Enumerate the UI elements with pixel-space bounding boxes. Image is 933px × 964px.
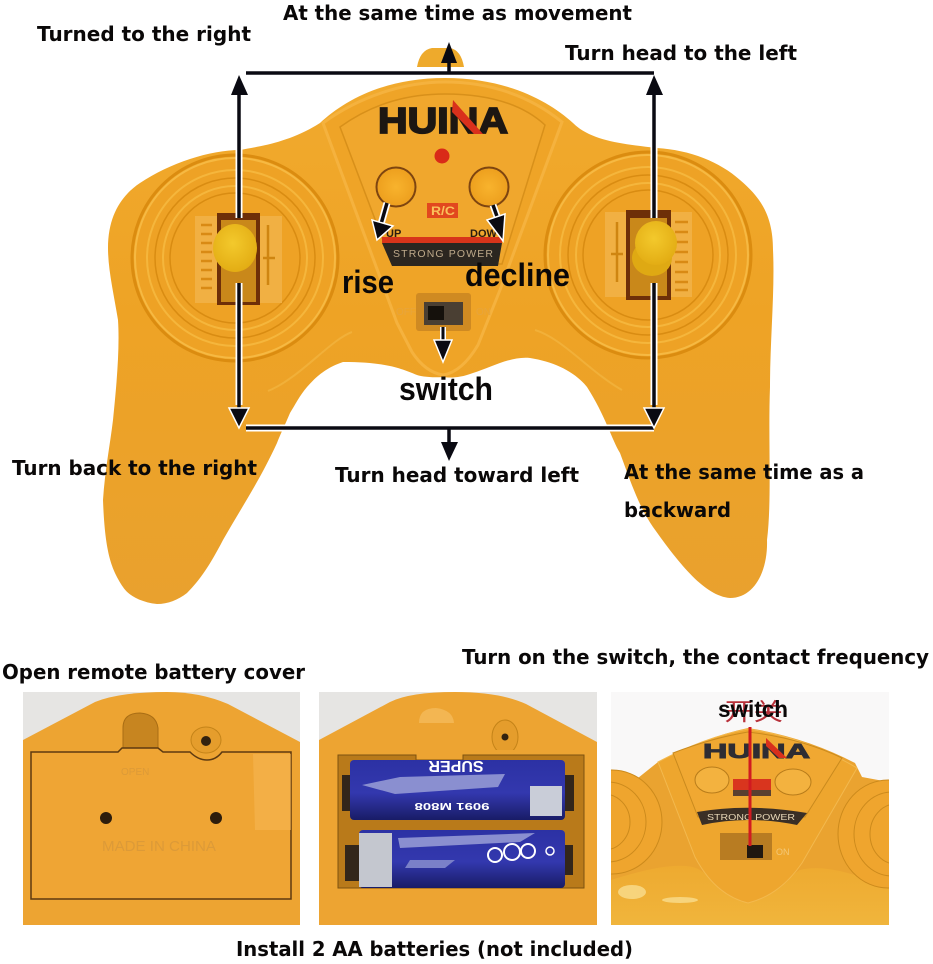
label: turn back to the right: Turn back to the right xyxy=(12,456,257,480)
left joystick slot xyxy=(195,213,282,305)
arrowheads xyxy=(229,42,664,461)
right dial xyxy=(838,780,889,888)
power switch: ON xyxy=(476,307,491,318)
pointer line xyxy=(748,727,752,846)
down button xyxy=(470,168,508,206)
faceplate outer with lower wedge xyxy=(323,82,562,375)
latch xyxy=(419,708,454,723)
label: at the same time as a backward xyxy=(624,460,864,522)
springs xyxy=(342,775,574,881)
label: turn head to the left: Turn head to the left xyxy=(565,41,797,65)
left joystick knob xyxy=(213,224,257,272)
label: turned to the right: Turned to the right xyxy=(37,22,251,46)
switch label: switch xyxy=(718,696,788,722)
label: rise: rise xyxy=(342,264,394,300)
highlights xyxy=(618,885,698,903)
frequency badge xyxy=(733,779,771,796)
top antenna nub xyxy=(417,48,464,67)
switch slot xyxy=(720,833,790,860)
right joystick dial xyxy=(545,152,751,358)
screw post xyxy=(191,727,221,753)
top battery: 9091 M808 xyxy=(414,800,490,811)
heading: open remote battery cover: Open remote battery cover xyxy=(2,660,306,684)
UP / DOWN labels: DOW xyxy=(470,228,498,240)
LED xyxy=(434,148,450,164)
UP / DOWN labels xyxy=(386,228,498,240)
label: at the same time as movement: At the same time as movement xyxy=(283,1,632,25)
label: switch: switch xyxy=(399,371,493,407)
logo: HUINA xyxy=(703,741,810,763)
panel: batteries installed xyxy=(319,692,597,925)
R/C badge xyxy=(427,203,458,218)
top battery: SUPER xyxy=(428,757,484,774)
center faceplate inner xyxy=(340,94,545,264)
battery compartment xyxy=(332,723,589,893)
label: decline: decline xyxy=(465,257,570,293)
open text: OPEN xyxy=(121,767,149,778)
cover outline xyxy=(31,748,291,899)
cover holes xyxy=(100,812,222,824)
strong power plate xyxy=(382,237,502,266)
logo xyxy=(704,738,810,758)
made in china text: MADE IN CHINA xyxy=(102,838,216,855)
lower highlight area xyxy=(611,872,889,925)
strong power plate xyxy=(697,808,807,825)
controller closeup body xyxy=(611,728,880,880)
label: turn head toward left: Turn head toward left xyxy=(335,463,579,487)
left joystick dial xyxy=(132,155,338,361)
right joystick knob xyxy=(632,221,677,276)
top battery xyxy=(350,757,565,820)
label: at the same time as a backward: backward xyxy=(624,498,731,522)
screw post xyxy=(492,720,518,754)
controller body xyxy=(103,78,773,604)
closeup faceplate xyxy=(658,729,857,903)
chinese switch label: 开关 xyxy=(724,699,783,726)
panel: battery cover closed xyxy=(23,692,300,925)
buttons xyxy=(695,767,811,795)
cover latch xyxy=(123,713,158,752)
power switch: OFF xyxy=(396,307,416,318)
switch slot: ON xyxy=(776,847,790,857)
button arrows xyxy=(372,203,505,241)
right joystick slot xyxy=(605,210,692,300)
up button xyxy=(376,168,416,206)
left dial xyxy=(611,770,662,874)
body crease xyxy=(268,330,622,391)
strong power plate: STRONG POWER xyxy=(393,248,493,260)
panel: switch closeup xyxy=(611,700,889,925)
strong power plate: STRONG POWER xyxy=(707,812,795,822)
caption: install batteries: Install 2 AA batteries (not included) xyxy=(236,937,633,961)
controller illustration xyxy=(103,48,773,604)
brand logo: HUINA xyxy=(378,100,508,141)
annotation frame with arrows xyxy=(239,58,654,444)
cover highlight xyxy=(253,754,291,830)
power switch xyxy=(396,293,491,331)
bottom battery xyxy=(359,830,565,888)
R/C badge: R/C xyxy=(431,204,455,218)
UP / DOWN labels: UP xyxy=(386,228,401,240)
label: at the same time as a backward: At the same time as a xyxy=(624,460,864,484)
heading: turn on the switch: Turn on the switch, the contact frequency xyxy=(462,645,929,669)
